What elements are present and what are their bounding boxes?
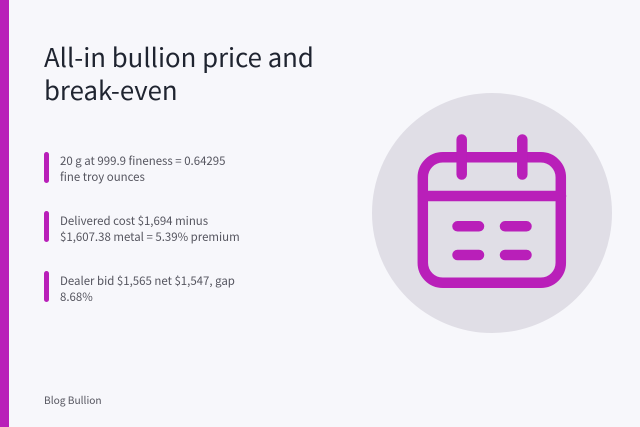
- bullet 1 text: 20 g at 999.9 fineness = 0.64295: [60, 153, 225, 169]
- bullet 2 text: $1,607.38 metal = 5.39% premium: [60, 229, 240, 245]
- footer brand: Blog Bullion: [44, 392, 102, 407]
- calendar illustration: [372, 93, 612, 333]
- title: [44, 38, 314, 108]
- bullet 2: [44, 211, 240, 245]
- bullet 1 text: [60, 153, 225, 185]
- bullet 2 marker: [44, 211, 49, 242]
- icon: calendar: [423, 140, 561, 283]
- bullet 2 text: [60, 213, 240, 245]
- bullet 2 text: Delivered cost $1,694 minus: [60, 213, 208, 229]
- bullet 1: [44, 152, 225, 185]
- bullet 1 text: fine troy ounces: [60, 169, 145, 185]
- accent strip: [0, 0, 9, 427]
- bullet 3 marker: [44, 271, 49, 302]
- title: break-even: [44, 71, 178, 108]
- bullet 3 text: 8.68%: [60, 289, 93, 305]
- bullet 3: [44, 271, 235, 305]
- bullet 1 marker: [44, 152, 49, 183]
- bullet 3 text: [60, 273, 235, 305]
- title: All-in bullion price and: [44, 38, 314, 75]
- background circle: [372, 93, 612, 333]
- bullet 3 text: Dealer bid $1,565 net $1,547, gap: [60, 273, 235, 289]
